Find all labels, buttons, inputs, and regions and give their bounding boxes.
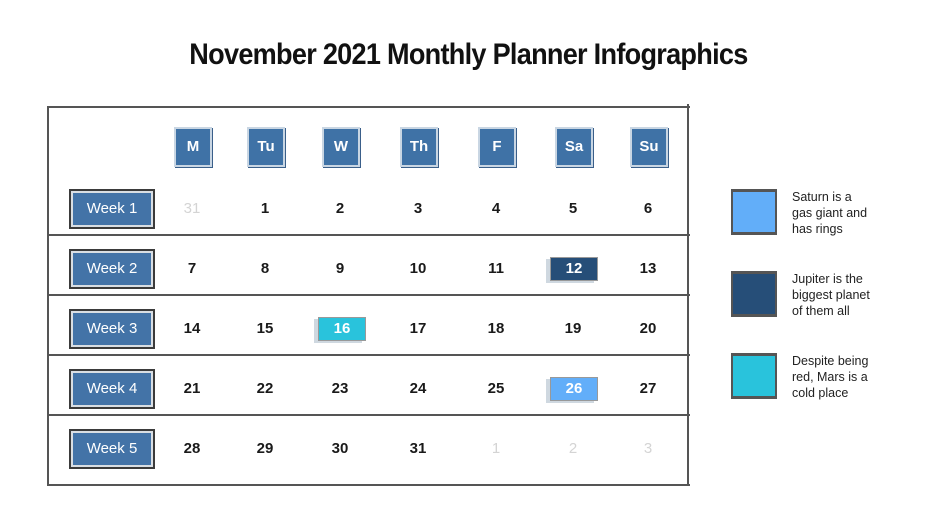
highlighted dates: 16 bbox=[334, 320, 350, 337]
dates: 24 bbox=[410, 380, 426, 397]
day headers: Su bbox=[639, 138, 659, 155]
dates: 21 bbox=[184, 380, 200, 397]
dates: 11 bbox=[488, 260, 504, 277]
week labels: Week 5 bbox=[87, 440, 137, 457]
week labels: Week 2 bbox=[87, 260, 137, 277]
day headers: W bbox=[334, 138, 348, 155]
dates: 28 bbox=[184, 440, 200, 457]
dates: 20 bbox=[640, 320, 656, 337]
panel: calendar table bbox=[47, 104, 690, 486]
dates: 23 bbox=[332, 380, 348, 397]
dates: 22 bbox=[257, 380, 273, 397]
dates: 9 bbox=[336, 260, 344, 277]
day headers: F bbox=[492, 138, 502, 155]
dates bbox=[184, 200, 656, 457]
legend item: Saturn: has rings bbox=[792, 222, 843, 236]
dates: 31 bbox=[410, 440, 426, 457]
dates: 14 bbox=[184, 320, 200, 337]
dates: 10 bbox=[410, 260, 426, 277]
day headers: Th bbox=[410, 138, 428, 155]
week labels: Week 3 bbox=[87, 320, 137, 337]
dates: 4 bbox=[492, 200, 500, 217]
dates: 25 bbox=[488, 380, 504, 397]
dates: 27 bbox=[640, 380, 656, 397]
dates: 1 bbox=[492, 440, 500, 457]
legend item: Jupiter: of them all bbox=[792, 304, 850, 318]
legend item: Saturn: gas giant and bbox=[792, 206, 867, 220]
dates: 19 bbox=[565, 320, 581, 337]
legend item: Mars bbox=[731, 353, 868, 400]
highlighted dates: 26 bbox=[566, 380, 582, 397]
legend item: Saturn: Saturn is a bbox=[792, 190, 852, 204]
dates: 17 bbox=[410, 320, 426, 337]
title: November 2021 Monthly Planner Infographics bbox=[189, 38, 748, 71]
legend item: Jupiter bbox=[731, 271, 870, 318]
dates: 3 bbox=[644, 440, 652, 457]
dates: 29 bbox=[257, 440, 273, 457]
week labels: Week 1 bbox=[87, 200, 137, 217]
dates: 31 bbox=[184, 200, 200, 217]
day headers: Tu bbox=[257, 138, 275, 155]
dates: 2 bbox=[336, 200, 344, 217]
dates: 7 bbox=[188, 260, 196, 277]
legend item: Jupiter: Jupiter is the bbox=[792, 272, 863, 286]
dates: 2 bbox=[569, 440, 577, 457]
legend item: Jupiter: biggest planet bbox=[792, 288, 870, 302]
legend item: Mars: cold place bbox=[792, 386, 848, 400]
dates: 8 bbox=[261, 260, 269, 277]
dates: 3 bbox=[414, 200, 422, 217]
highlighted dates bbox=[314, 257, 598, 403]
day headers bbox=[174, 127, 669, 168]
day headers: M bbox=[187, 138, 199, 155]
dates: 30 bbox=[332, 440, 348, 457]
legend item: Mars: Despite being bbox=[792, 354, 868, 368]
legend item: Mars: red, Mars is a bbox=[792, 370, 868, 384]
day headers: Sa bbox=[565, 138, 583, 155]
dates: 5 bbox=[569, 200, 577, 217]
legend bbox=[731, 189, 870, 400]
dates: 15 bbox=[257, 320, 273, 337]
dates: 6 bbox=[644, 200, 652, 217]
dates: 13 bbox=[640, 260, 656, 277]
legend item: Saturn bbox=[731, 189, 867, 236]
dates: 1 bbox=[261, 200, 269, 217]
week labels bbox=[69, 189, 155, 469]
week labels: Week 4 bbox=[87, 380, 137, 397]
dates: 18 bbox=[488, 320, 504, 337]
highlighted dates: 12 bbox=[566, 260, 582, 277]
